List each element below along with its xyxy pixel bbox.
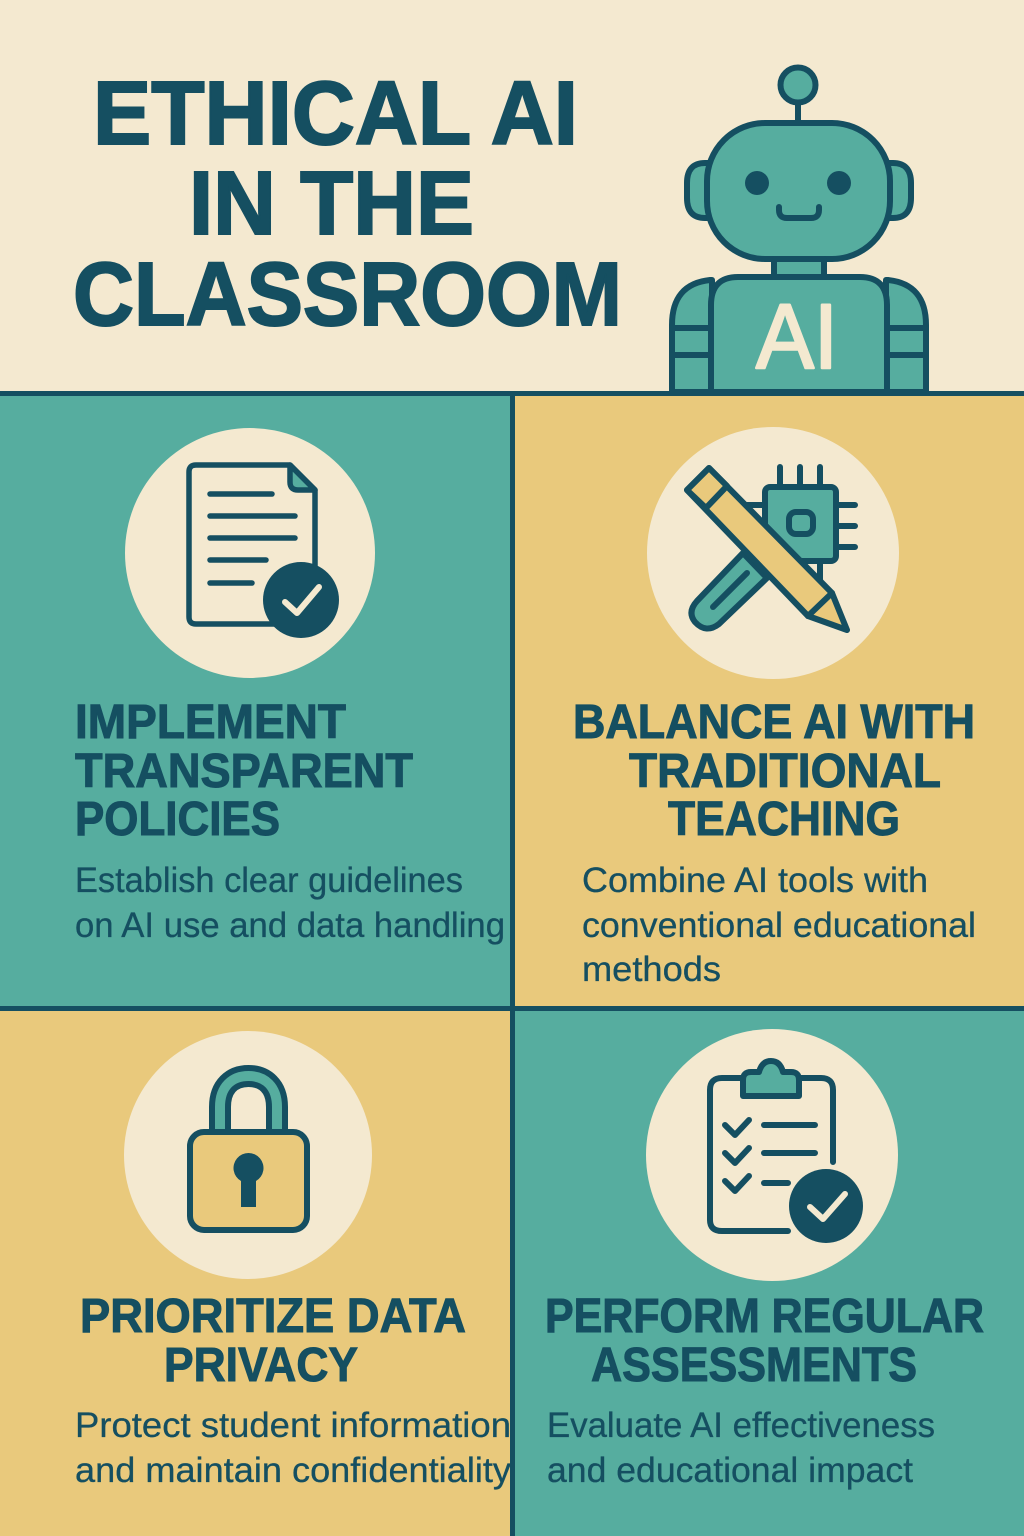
icon: document with check bbox=[189, 465, 339, 638]
icon: pencil and chip bbox=[687, 467, 855, 630]
body text: conventional educational bbox=[582, 906, 976, 945]
body text: methods bbox=[582, 950, 721, 989]
title: CLASSROOM bbox=[73, 245, 622, 345]
body text: Evaluate AI effectiveness bbox=[547, 1406, 935, 1445]
divider lines bbox=[0, 391, 1024, 1536]
body text bbox=[75, 1406, 512, 1490]
heading: TEACHING bbox=[668, 793, 900, 846]
icon background circle bbox=[647, 427, 899, 679]
heading bbox=[573, 696, 975, 846]
body text: and educational impact bbox=[547, 1451, 913, 1490]
panel: perform regular assessments bbox=[512, 1008, 1024, 1536]
heading bbox=[545, 1290, 984, 1392]
icon: padlock bbox=[190, 1068, 307, 1230]
heading: ASSESSMENTS bbox=[591, 1339, 917, 1392]
title bbox=[73, 64, 622, 345]
heading: TRANSPARENT bbox=[75, 745, 413, 798]
panel: implement transparent policies bbox=[0, 393, 512, 1008]
icon: robot bbox=[672, 68, 926, 392]
body text bbox=[547, 1406, 935, 1490]
icon background circle bbox=[125, 428, 375, 678]
heading: PRIORITIZE DATA bbox=[80, 1290, 466, 1343]
icon: clipboard with check bbox=[710, 1061, 863, 1243]
heading: PERFORM REGULAR bbox=[545, 1290, 984, 1343]
heading: TRADITIONAL bbox=[629, 745, 941, 798]
heading: POLICIES bbox=[75, 793, 280, 846]
title: IN THE bbox=[189, 154, 474, 254]
title: ETHICAL AI bbox=[93, 64, 578, 164]
icon background circle bbox=[124, 1031, 372, 1279]
icon background circle bbox=[646, 1029, 898, 1281]
body text bbox=[75, 861, 505, 945]
panel: prioritize data privacy bbox=[0, 1008, 512, 1536]
body text: on AI use and data handling bbox=[75, 906, 505, 945]
heading: PRIVACY bbox=[164, 1339, 358, 1392]
body text: and maintain confidentiality bbox=[75, 1451, 512, 1490]
heading bbox=[75, 696, 413, 846]
panel: balance AI with traditional teaching bbox=[512, 393, 1024, 1008]
body text: Protect student information bbox=[75, 1406, 511, 1445]
body text: Combine AI tools with bbox=[582, 861, 928, 900]
heading bbox=[80, 1290, 466, 1392]
body text bbox=[582, 861, 976, 989]
body text: Establish clear guidelines bbox=[75, 861, 463, 900]
icon: robot: AI bbox=[756, 286, 838, 388]
heading: BALANCE AI WITH bbox=[573, 696, 975, 749]
heading: IMPLEMENT bbox=[75, 696, 346, 749]
